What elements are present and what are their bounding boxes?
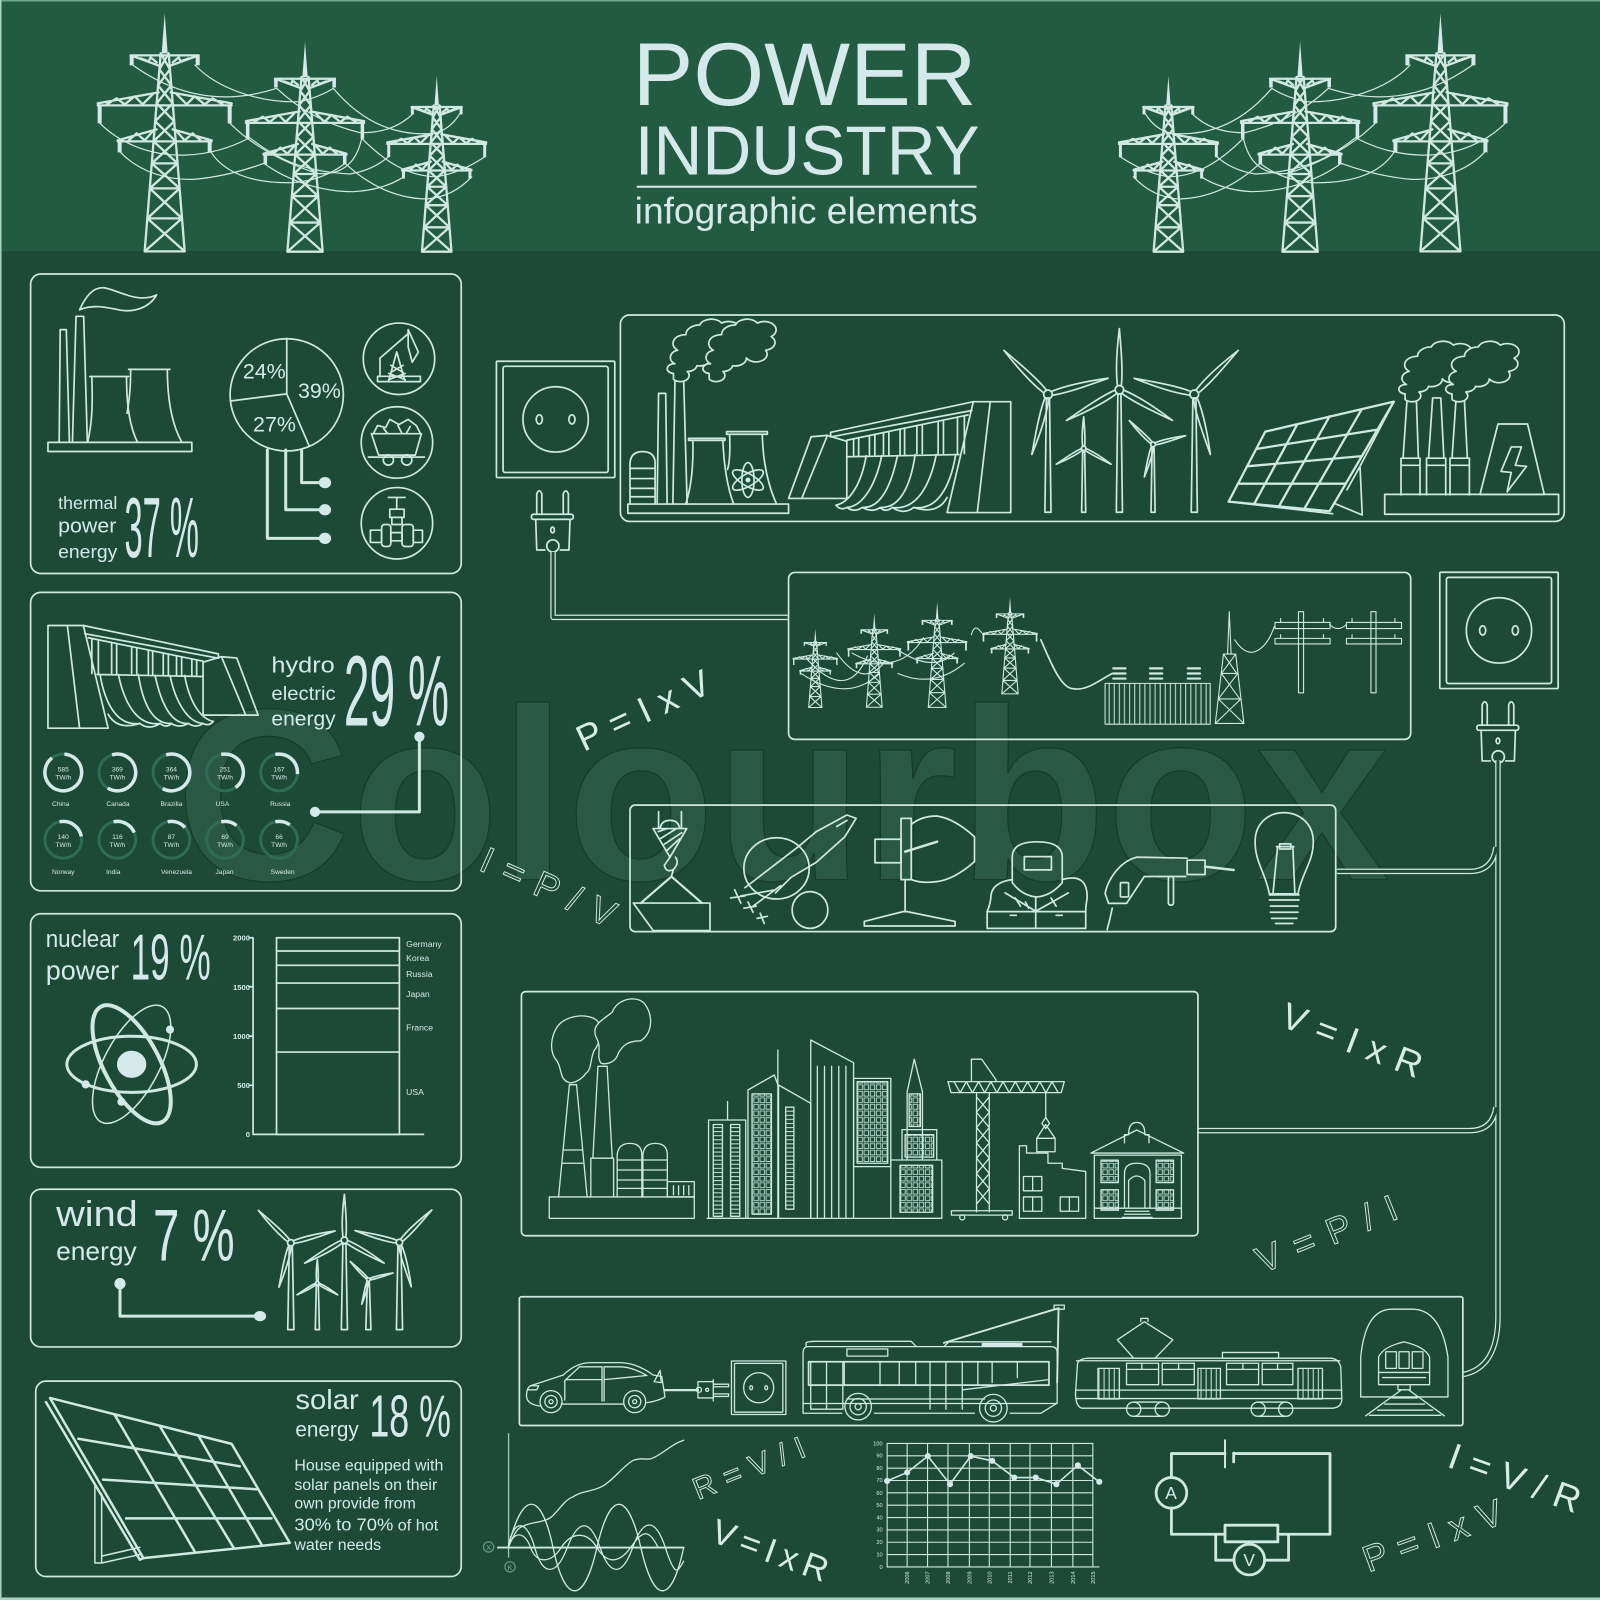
label: thermal power energy: power (58, 516, 117, 538)
formula: V = P / I: V = P / I (1250, 1187, 1403, 1281)
circuit diagram: A (1165, 1483, 1177, 1503)
panel: thermal power: 37 % (124, 480, 199, 576)
label: hydro electric energy (271, 636, 449, 748)
cable: right plug to consumers (1198, 760, 1498, 1374)
icon: utility poles (1275, 612, 1402, 693)
text: solar description: 30% to 70% of hot (294, 1515, 439, 1535)
icon: transformer (1105, 668, 1210, 724)
title (633, 25, 980, 231)
right plug (1477, 702, 1519, 763)
line chart: 2015 (1091, 1571, 1097, 1584)
icon: coal cart (361, 407, 433, 478)
icon: atom (67, 994, 196, 1135)
formula: P = I x V lower: P = I x V (1357, 1491, 1509, 1580)
label: hydro electric energy: electric (271, 683, 336, 705)
country generation gauges: Norway (52, 869, 75, 876)
icon: oil pump (363, 323, 435, 394)
panel: solar energy (36, 1381, 461, 1577)
icon: nuclear plant (628, 319, 789, 513)
icon: welder (987, 842, 1087, 928)
country generation gauges: TW/h (164, 842, 180, 849)
icon: pylons (793, 597, 1037, 708)
icon: thermal plant (48, 288, 192, 452)
stacked bar chart: 1000 (233, 1032, 250, 1041)
stacked bar chart (233, 933, 442, 1139)
stacked bar chart: Russia (406, 969, 433, 979)
country generation gauges: 251 (219, 766, 231, 773)
country generation gauges: Canada (106, 801, 130, 808)
country generation gauges: China (52, 801, 70, 808)
panel: city (521, 992, 1198, 1236)
country generation gauges: 87 (168, 834, 175, 841)
icon: charging plug (665, 1380, 729, 1401)
panel: transmission grid (789, 572, 1411, 739)
icon: angle grinder (731, 815, 856, 928)
icon: tram (1076, 1318, 1342, 1416)
country generation gauges: 364 (166, 766, 177, 773)
text: solar description: water needs (293, 1537, 381, 1554)
country generation gauges: USA (216, 801, 230, 808)
line chart: 70 (876, 1478, 883, 1484)
label: wind energy (55, 1194, 235, 1277)
line chart: 2009 (967, 1571, 973, 1584)
text: solar description: House equipped with (294, 1457, 443, 1474)
icon: power drill (1105, 857, 1234, 930)
panel: electric transport (519, 1297, 1463, 1426)
stacked bar chart: 500 (237, 1081, 250, 1090)
title: POWER (633, 25, 977, 124)
icon: solar array (1229, 402, 1394, 515)
wave chart (483, 1434, 684, 1591)
icon: crane hook and bin (633, 812, 710, 931)
stacked bar chart: 0 (246, 1130, 250, 1139)
label: nuclear power (46, 921, 211, 994)
country generation gauges: TW/h (217, 775, 233, 782)
formula: V = I x R lower: V = I x R (706, 1513, 834, 1590)
label: hydro electric energy: hydro (271, 652, 335, 677)
pie connector lines (267, 450, 331, 544)
icon: metro tunnel (1361, 1309, 1448, 1416)
line chart: 80 (876, 1466, 883, 1472)
line chart: 100 (873, 1441, 883, 1447)
cable: left plug to grid panel (553, 552, 788, 617)
panel: hydro electric (31, 592, 461, 891)
right pylons and wires (1119, 13, 1507, 252)
pie chart: 27% (253, 413, 296, 437)
stacked bar chart: Germany (406, 939, 442, 949)
formula: V = I x R upper: V = I x R (1276, 995, 1429, 1086)
line chart: 50 (876, 1503, 883, 1509)
label: wind energy: energy (56, 1238, 137, 1266)
formula: R = V / I: R = V / I (688, 1431, 810, 1506)
panel: wind energy (31, 1181, 461, 1347)
country generation gauges: TW/h (109, 842, 126, 849)
line chart: 2008 (946, 1571, 952, 1584)
formula: I = V / R: I = V / R (1443, 1435, 1587, 1521)
icon: thermal station with stacks (1385, 341, 1559, 514)
axis markers (483, 1542, 515, 1572)
stacked bar chart: France (406, 1023, 433, 1033)
country generation gauges: TW/h (164, 775, 180, 782)
cable to transformer (1041, 640, 1112, 689)
label: thermal power energy: thermal (58, 493, 117, 513)
icon: electric car (527, 1363, 665, 1413)
line chart: 2011 (1008, 1571, 1014, 1583)
icon: hydro dam (48, 626, 258, 728)
left socket (496, 361, 615, 478)
label: nuclear power: power (46, 956, 119, 986)
country generation gauges: Japan (215, 869, 234, 876)
icon: light bulb (1255, 813, 1313, 923)
label: hydro electric energy: energy (271, 709, 337, 731)
line chart: 0 (880, 1565, 883, 1571)
stacked bar chart: 1500 (233, 983, 250, 992)
icon: factory (549, 999, 694, 1218)
icon: trolleybus (803, 1305, 1064, 1422)
line chart: 10 (876, 1553, 883, 1559)
icon: solar panel (46, 1398, 290, 1563)
country generation gauges: 167 (274, 766, 285, 773)
icon: lattice mast (1215, 612, 1274, 723)
country generation gauges: 369 (112, 766, 123, 773)
icon: dam (789, 402, 1011, 513)
title: INDUSTRY (635, 111, 980, 189)
pie chart (230, 338, 343, 451)
line chart: 40 (876, 1515, 883, 1521)
icon: tower crane (948, 1059, 1064, 1220)
icon: house (1091, 1122, 1184, 1218)
country generation gauges: 585 (58, 766, 69, 773)
country generation gauges: TW/h (271, 842, 287, 849)
line chart: 2014 (1071, 1571, 1077, 1584)
line chart: 30 (876, 1528, 883, 1534)
country generation gauges: 69 (221, 834, 229, 841)
line chart: 20 (876, 1540, 883, 1546)
label: solar energy: solar (295, 1384, 359, 1415)
label: solar energy: energy (295, 1418, 359, 1442)
country generation gauges (42, 751, 299, 876)
label: nuclear power: nuclear (46, 926, 119, 953)
icon: building under construction (1019, 1146, 1086, 1218)
country generation gauges: TW/h (217, 842, 233, 849)
axis markers: X (486, 1544, 491, 1552)
line chart: 2010 (987, 1571, 993, 1584)
country generation gauges: Brazilia (161, 801, 183, 808)
stacked bar chart: Korea (406, 953, 429, 963)
icon: pipe valve (361, 488, 433, 559)
line chart: 60 (876, 1491, 883, 1497)
right socket (1440, 572, 1558, 689)
circuit diagram: V (1243, 1550, 1255, 1570)
label: solar energy: 18 % (369, 1383, 451, 1450)
panel: electric tools (630, 805, 1336, 932)
connector (114, 1278, 266, 1321)
panel: thermal power (31, 274, 461, 576)
country generation gauges: Venezuela (161, 869, 192, 876)
left pylons and wires (98, 13, 486, 252)
stacked bar chart: Japan (406, 989, 430, 999)
country generation gauges: 140 (58, 834, 69, 841)
label: thermal power energy: energy (58, 541, 118, 562)
panel: hydro electric: 29 % (344, 636, 449, 748)
panel: power generation (620, 311, 1564, 521)
line chart: 90 (876, 1454, 883, 1460)
line chart: 2007 (926, 1571, 932, 1584)
country generation gauges: TW/h (271, 775, 287, 782)
pie chart: 24% (243, 360, 286, 384)
icon: wind farm (965, 311, 1277, 512)
formula: P = I x V upper: P = I x V (570, 662, 717, 759)
formula: I = P / V: I = P / V (474, 839, 623, 935)
icon: skyscrapers (707, 1040, 942, 1218)
watermark: Colourbox (176, 658, 1390, 932)
country generation gauges: 116 (112, 834, 123, 841)
text: solar description (293, 1457, 443, 1554)
line chart: 2013 (1049, 1571, 1055, 1584)
header band (0, 0, 1600, 251)
text: solar description: own provide from (294, 1496, 416, 1513)
country generation gauges: TW/h (109, 775, 126, 782)
icon: car charging socket (731, 1361, 786, 1415)
country generation gauges: TW/h (55, 775, 71, 782)
label: thermal power energy (58, 480, 199, 576)
line chart (873, 1441, 1102, 1584)
circuit diagram (1156, 1440, 1330, 1575)
country generation gauges: Sweden (271, 869, 295, 876)
line chart: 2006 (905, 1571, 911, 1584)
connector (310, 732, 424, 817)
icon: wind turbines (230, 1181, 461, 1330)
title: infographic elements (635, 190, 978, 231)
country generation gauges: Russia (270, 801, 291, 808)
label: wind energy: wind (55, 1194, 138, 1234)
country generation gauges: TW/h (55, 842, 71, 849)
left plug (531, 491, 573, 552)
stacked bar chart: 2000 (233, 933, 250, 942)
line chart: 2012 (1028, 1571, 1034, 1584)
country generation gauges: India (106, 869, 121, 876)
label: wind energy: 7 % (153, 1194, 235, 1277)
text: solar description: solar panels on their (294, 1477, 437, 1494)
country generation gauges: 66 (275, 834, 283, 841)
panel: nuclear power (31, 914, 461, 1167)
label: nuclear power: 19 % (131, 921, 211, 994)
axis markers: K (508, 1564, 513, 1572)
label: solar energy (295, 1383, 451, 1450)
icon: electric fan (864, 816, 974, 926)
pie chart: 39% (298, 379, 341, 403)
stacked bar chart: USA (406, 1087, 424, 1097)
